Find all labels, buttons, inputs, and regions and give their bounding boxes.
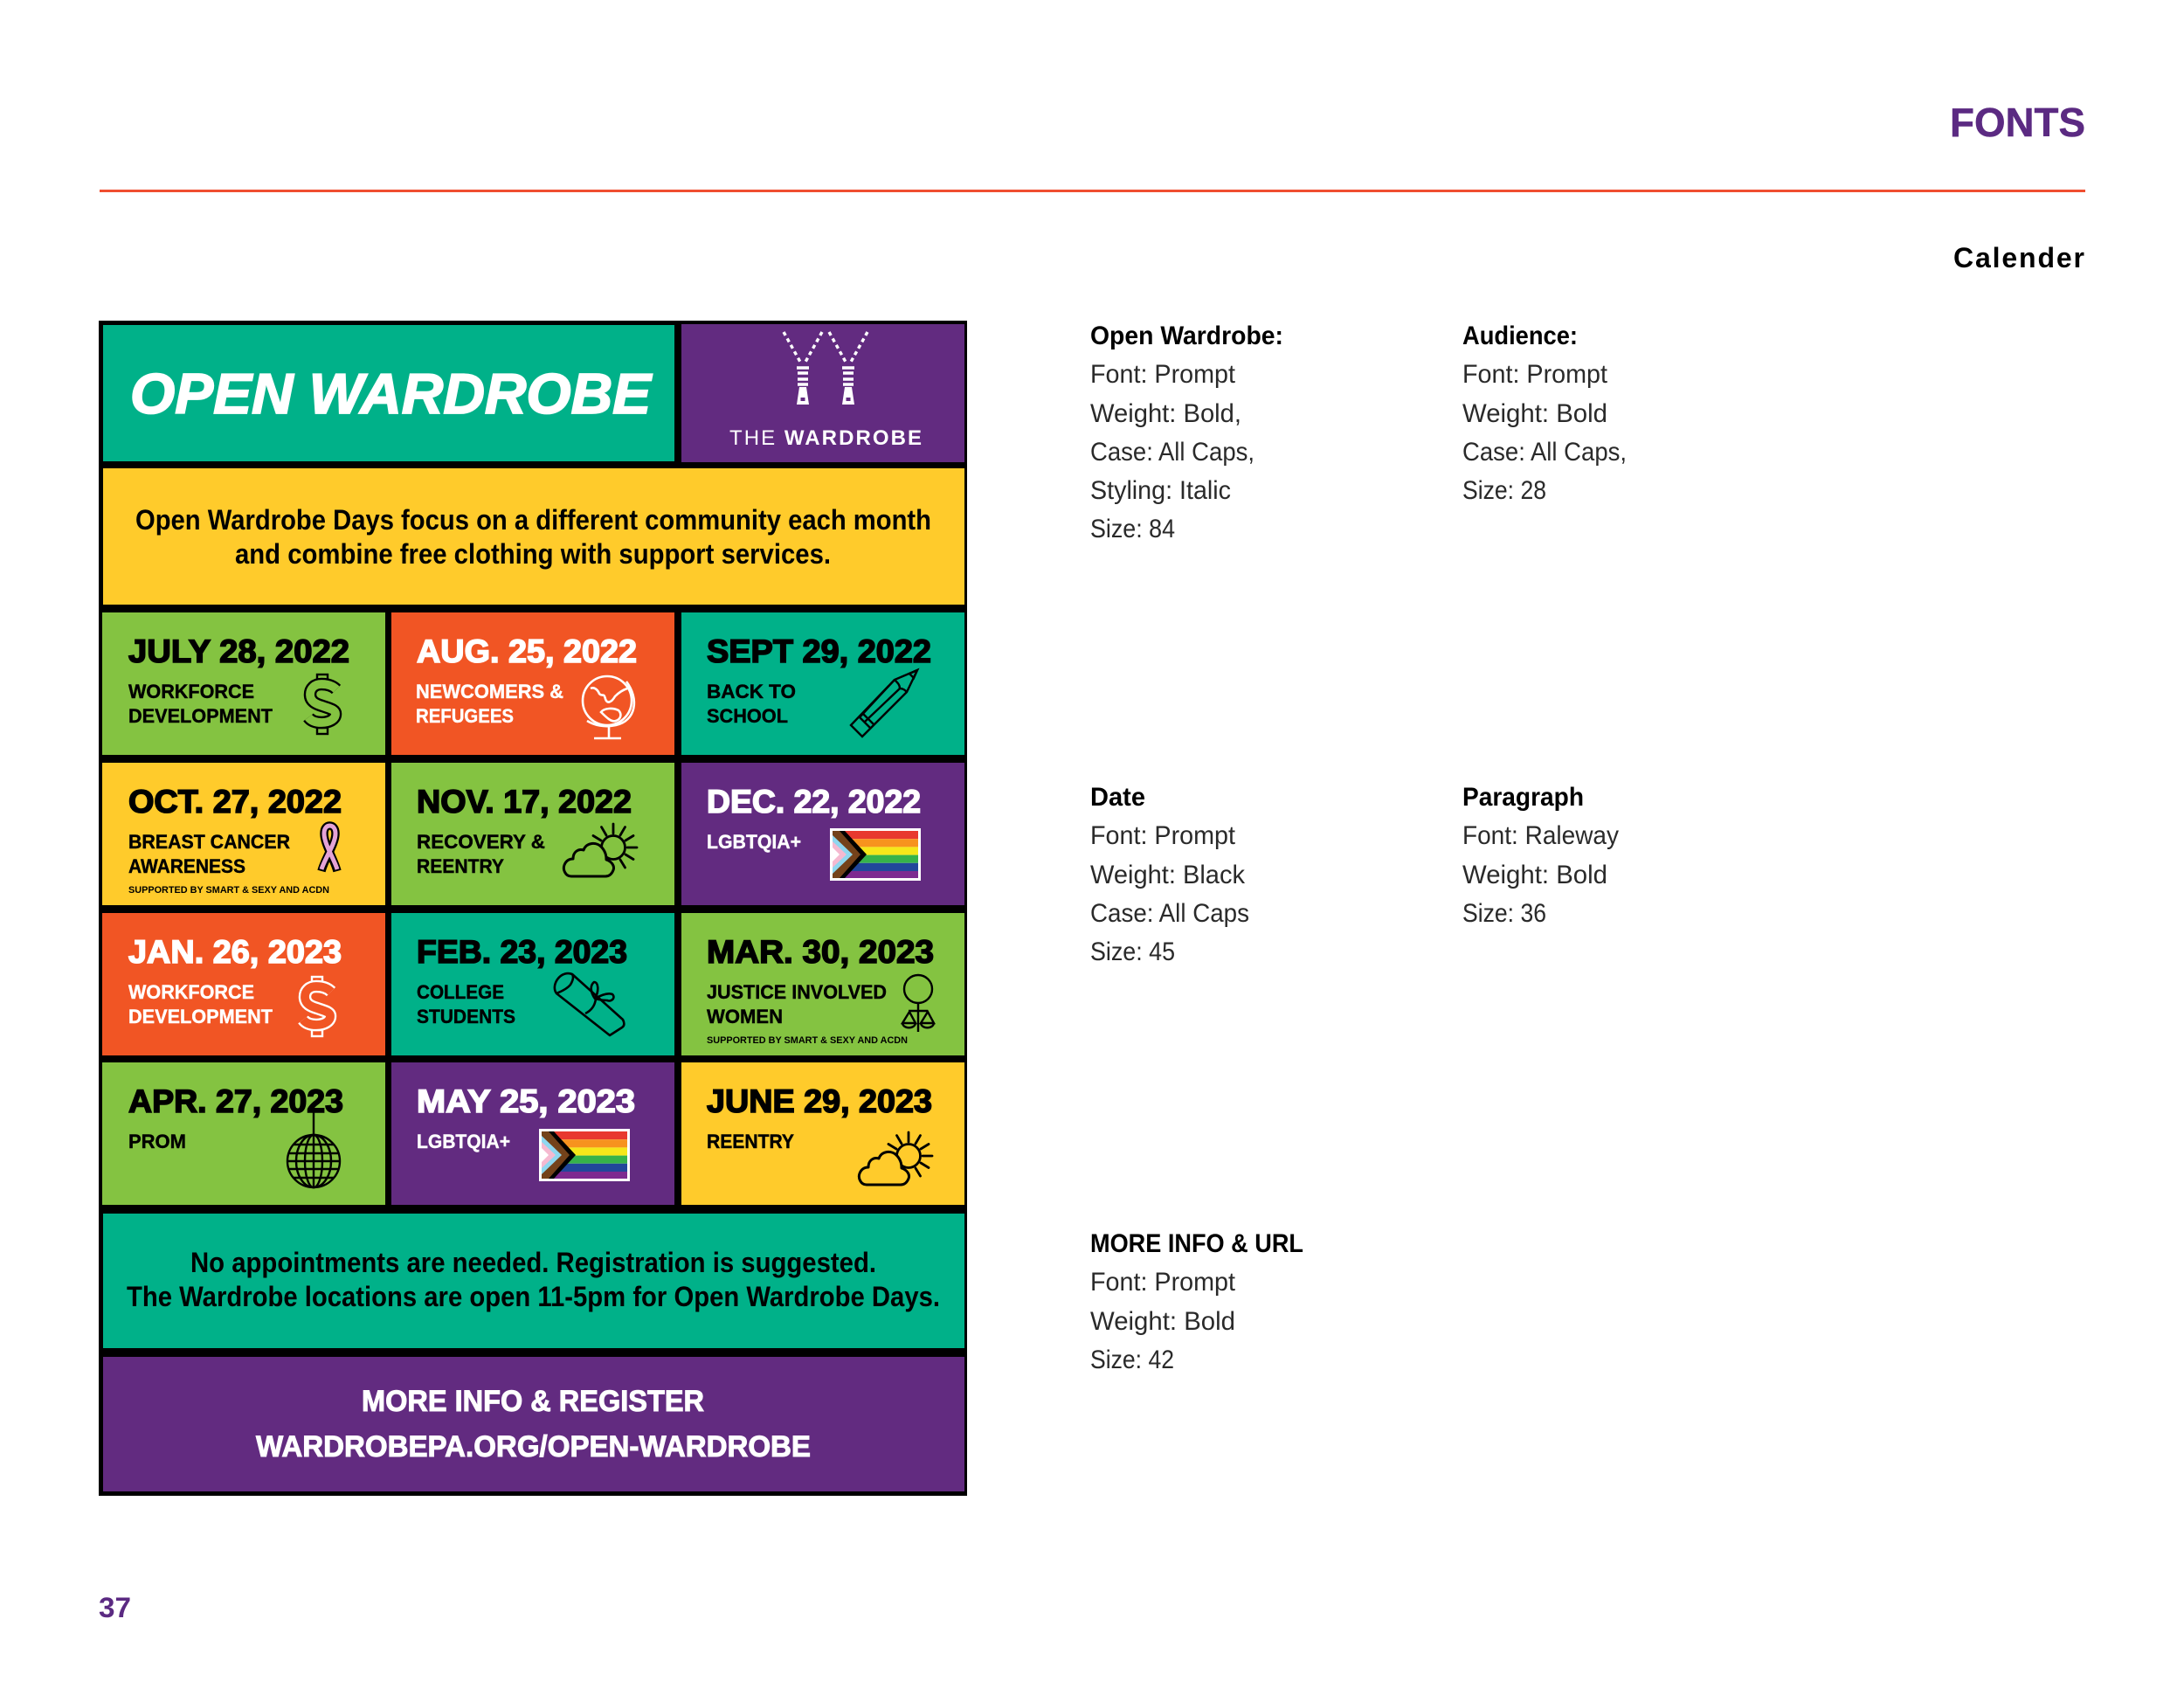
cell: Aug. 25, 2022: NEWCOMERS & <box>416 681 563 702</box>
panel: appointments note: The Wardrobe locations are open 11-5pm for Open Wardrobe Days. <box>127 1281 940 1312</box>
cell: Oct. 27, 2022: AWARENESS <box>128 855 245 877</box>
panel: appointments note <box>103 1214 964 1348</box>
icon: pencil <box>851 670 917 737</box>
panel: The Wardrobe logo <box>681 324 964 462</box>
cell: Oct. 27, 2022: BREAST CANCER <box>128 831 290 853</box>
cell: Feb. 23, 2023: FEB. 23, 2023 <box>417 934 627 970</box>
spec: Paragraph <box>1462 783 1619 928</box>
section label: Calender: Calender <box>1953 242 2084 273</box>
cell: Aug. 25, 2022 <box>391 612 674 755</box>
icon: dollar <box>303 977 331 1036</box>
icon: disco ball <box>287 1112 340 1187</box>
spec: Date: Case: All Caps <box>1090 899 1249 928</box>
cell: Apr. 27, 2023: APR. 27, 2023 <box>128 1083 343 1119</box>
cell: Oct. 27, 2022: OCT. 27, 2022 <box>128 784 342 820</box>
spec: Audience: Audience: <box>1462 322 1578 350</box>
spec: Open Wardrobe: Weight: Bold, <box>1090 399 1241 428</box>
cell: Jan. 26, 2023 <box>102 913 385 1055</box>
spec: Paragraph: Weight: Bold <box>1462 861 1607 889</box>
cell: Sept 29, 2022 <box>681 612 964 755</box>
cell: Dec. 22, 2022: LGBTQIA+ <box>707 831 801 853</box>
spec: Audience <box>1462 322 1627 505</box>
cell: Feb. 23, 2023: STUDENTS <box>417 1006 515 1027</box>
spec: Open Wardrobe: Size: 84 <box>1090 515 1175 543</box>
cell: Nov. 17, 2022 <box>391 763 674 905</box>
spec: Open Wardrobe: Case: All Caps, <box>1090 438 1254 467</box>
cell: Mar. 30, 2023: WOMEN <box>707 1006 783 1027</box>
poster: Open Wardrobe calendar <box>99 321 967 1496</box>
panel: intro text: Open Wardrobe Days focus on a different community each month <box>135 504 931 536</box>
icon: globe <box>583 676 634 738</box>
spec: More info and URL: MORE INFO & URL <box>1090 1229 1303 1258</box>
icon: zipper logo <box>784 332 867 405</box>
spec: Date: Weight: Black <box>1090 861 1246 889</box>
spec: Date: Date <box>1090 783 1145 812</box>
icon: progress flag <box>830 828 921 881</box>
cell: Sept 29, 2022: SEPT 29, 2022 <box>707 633 931 669</box>
cell: Dec. 22, 2022 <box>681 763 964 905</box>
icon: progress flag <box>539 1129 630 1181</box>
cell: Oct. 27, 2022: SUPPORTED BY SMART & SEXY AND ACDN <box>128 885 329 896</box>
icon: sun and cloud <box>563 824 637 876</box>
spec: Audience: Case: All Caps, <box>1462 438 1627 467</box>
cell: Mar. 30, 2023: MAR. 30, 2023 <box>707 934 934 970</box>
icon: diploma <box>555 973 624 1035</box>
icon: sun and cloud <box>859 1132 932 1185</box>
cell: June 29, 2023: REENTRY <box>707 1131 794 1152</box>
panel: intro text <box>103 468 964 605</box>
cell: Mar. 30, 2023: SUPPORTED BY SMART & SEXY AND ACDN <box>707 1035 908 1046</box>
spec: Audience: Weight: Bold <box>1462 399 1607 428</box>
cell: June 29, 2023 <box>681 1062 964 1205</box>
panel: The Wardrobe logo: THE WARDROBE <box>729 426 922 450</box>
panel: more info and register: WARDROBEPA.ORG/OPEN-WARDROBE <box>256 1430 811 1463</box>
cell: Feb. 23, 2023 <box>391 913 674 1055</box>
spec: Open Wardrobe: Font: Prompt <box>1090 360 1236 389</box>
spec: Open Wardrobe <box>1090 322 1283 543</box>
spec: Date: Font: Prompt <box>1090 821 1236 850</box>
cell: Nov. 17, 2022: REENTRY <box>417 855 504 877</box>
cell: June 29, 2023: JUNE 29, 2023 <box>707 1083 932 1119</box>
icon: justice symbol <box>902 975 934 1032</box>
cell: Oct. 27, 2022 <box>102 763 385 905</box>
panel: title: OPEN WARDROBE <box>130 362 653 425</box>
cell: Jan. 26, 2023: JAN. 26, 2023 <box>128 934 342 970</box>
spec: Audience: Font: Prompt <box>1462 360 1608 389</box>
cell: Sept 29, 2022: SCHOOL <box>707 705 788 727</box>
spec: More info and URL: Size: 42 <box>1090 1346 1174 1374</box>
spec: Date: Size: 45 <box>1090 937 1175 966</box>
cell: Mar. 30, 2023 <box>681 913 964 1055</box>
page heading: FONTS: FONTS <box>1950 100 2085 145</box>
icon: ribbon <box>321 826 337 871</box>
spec: Paragraph: Paragraph <box>1462 783 1584 812</box>
spec: More info and URL: Font: Prompt <box>1090 1268 1236 1297</box>
spec: More info and URL <box>1090 1229 1303 1374</box>
cell: Nov. 17, 2022: NOV. 17, 2022 <box>417 784 632 820</box>
cell: Jan. 26, 2023: DEVELOPMENT <box>128 1006 273 1027</box>
cell: Feb. 23, 2023: COLLEGE <box>417 981 504 1003</box>
cell: Mar. 30, 2023: JUSTICE INVOLVED <box>707 981 887 1003</box>
cell: July 28, 2022 <box>102 612 385 755</box>
cell: May 25, 2023: LGBTQIA+ <box>417 1131 510 1152</box>
cell: Apr. 27, 2023: PROM <box>128 1131 186 1152</box>
cell: Dec. 22, 2022: DEC. 22, 2022 <box>707 784 921 820</box>
cell: July 28, 2022: WORKFORCE <box>128 681 254 702</box>
cell: July 28, 2022: JULY 28, 2022 <box>128 633 349 669</box>
panel: title <box>103 325 674 461</box>
panel: appointments note: No appointments are needed. Registration is suggested. <box>190 1247 876 1278</box>
spec: Paragraph: Size: 36 <box>1462 899 1546 928</box>
spec: Date <box>1090 783 1249 966</box>
cell: Aug. 25, 2022: AUG. 25, 2022 <box>417 633 637 669</box>
cell: May 25, 2023: MAY 25, 2023 <box>417 1083 635 1119</box>
cell: Nov. 17, 2022: RECOVERY & <box>417 831 545 853</box>
panel: more info and register: MORE INFO & REGISTER <box>362 1385 704 1418</box>
spec: Open Wardrobe: Open Wardrobe: <box>1090 322 1283 350</box>
panel: intro text: and combine free clothing with support services. <box>235 538 831 570</box>
page number: 37 <box>99 1592 131 1623</box>
spec: Paragraph: Font: Raleway <box>1462 821 1619 850</box>
icon: dollar <box>308 675 336 734</box>
spec: Open Wardrobe: Styling: Italic <box>1090 476 1231 505</box>
cell: July 28, 2022: DEVELOPMENT <box>128 705 273 727</box>
cell: Apr. 27, 2023 <box>102 1062 385 1205</box>
cell: Sept 29, 2022: BACK TO <box>707 681 796 702</box>
panel: more info and register <box>103 1357 964 1491</box>
cell: May 25, 2023 <box>391 1062 674 1205</box>
spec: Audience: Size: 28 <box>1462 476 1546 505</box>
cell: Jan. 26, 2023: WORKFORCE <box>128 981 254 1003</box>
spec: More info and URL: Weight: Bold <box>1090 1307 1235 1336</box>
cell: Aug. 25, 2022: REFUGEES <box>416 705 514 727</box>
